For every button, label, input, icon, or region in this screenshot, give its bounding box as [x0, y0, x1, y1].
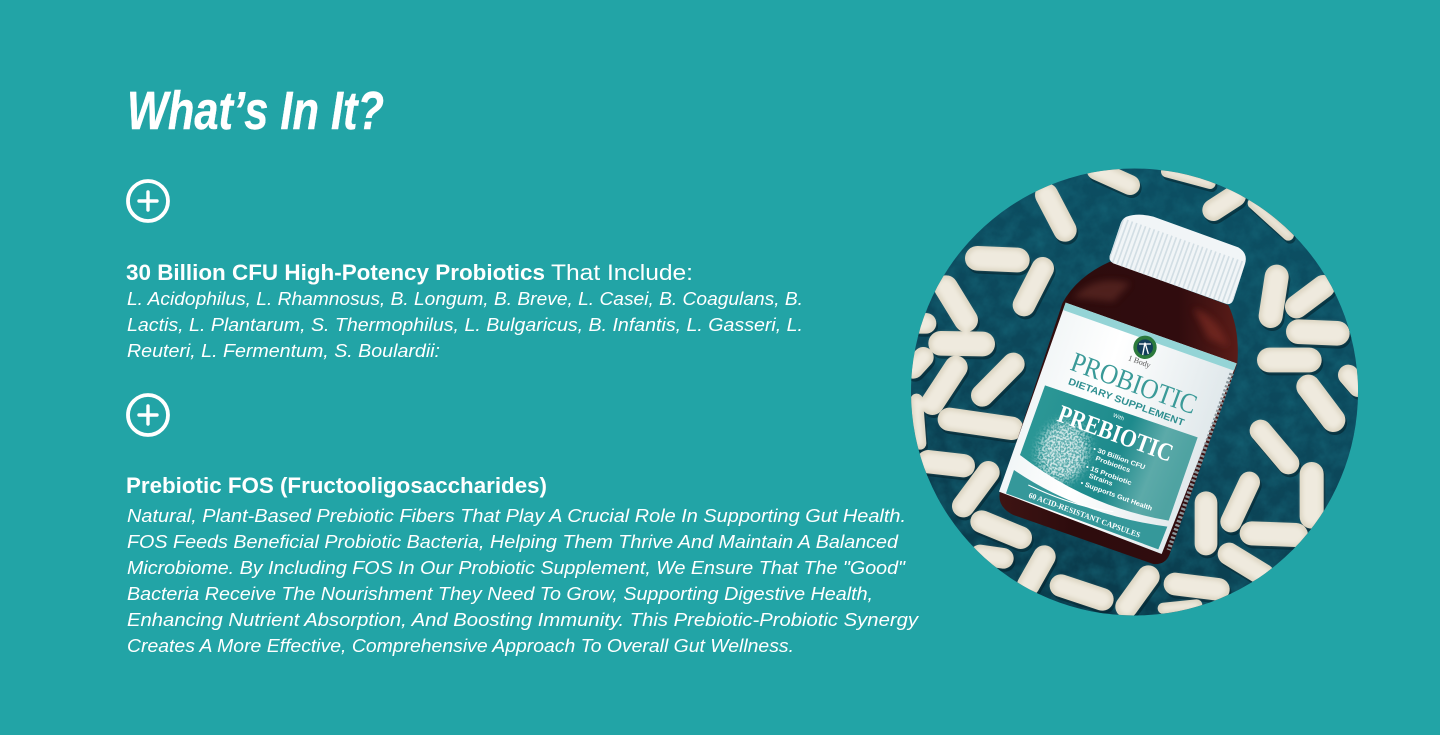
label text [1027, 347, 1201, 540]
label text: • Supports Gut Health [1079, 480, 1153, 513]
text block: prebiotic [126, 473, 919, 656]
lower teal band [1006, 470, 1167, 549]
circular product photo [905, 160, 1365, 625]
prebiotic description: Microbiome. By Including FOS In Our Probiotic Supplement, We Ensure That The "Good" [127, 558, 907, 578]
capsules [913, 170, 1360, 611]
heading: probiotics: That Include: [551, 260, 693, 285]
bottle glass [999, 262, 1238, 564]
heading: probiotics: 30 Billion CFU High-Potency Probiotics [126, 260, 545, 285]
bottle cap [1109, 215, 1246, 304]
icon: plus circle 2 [128, 395, 168, 435]
label text: 60 ACID-RESISTANT CAPSULES [1027, 491, 1142, 540]
heading: prebiotic: Prebiotic FOS (Fructooligosaccharides) [126, 473, 547, 498]
label text: DIETARY SUPPLEMENT [1067, 376, 1186, 429]
glass highlights [1073, 281, 1130, 302]
bottle [999, 215, 1246, 564]
text block: probiotics [126, 260, 803, 361]
label text: PREBIOTIC [1054, 400, 1177, 468]
white swoosh [1028, 485, 1113, 512]
label text: PROBIOTIC [1067, 347, 1201, 421]
strain list: L. Acidophilus, L. Rhamnosus, B. Longum, B. Breve, L. Casei, B. Coagulans, B. [127, 289, 803, 309]
strain list: Lactis, L. Plantarum, S. Thermophilus, L. Bulgaricus, B. Infantis, L. Gasseri, L. [127, 315, 803, 335]
prebiotic description [127, 506, 919, 656]
teal panel [1020, 385, 1198, 521]
title: What’s In It? [127, 81, 384, 141]
label text: With [1112, 413, 1125, 422]
strain list [127, 289, 803, 361]
plant illustration [1029, 413, 1098, 490]
strain list: Reuteri, L. Fermentum, S. Boulardii: [127, 341, 440, 361]
prebiotic description: Enhancing Nutrient Absorption, And Boosting Immunity. This Prebiotic-Probiotic Synergy [127, 610, 919, 630]
label text: • 30 Billion CFU [1092, 446, 1146, 471]
label text: 1 Body [1127, 353, 1152, 370]
icon: plus circle 1 [128, 181, 168, 221]
label text: Probiotics [1094, 455, 1131, 475]
label text: Strains [1088, 473, 1114, 488]
barcode strip [1169, 373, 1232, 550]
logo [1133, 336, 1157, 359]
label text: • 15 Probiotic [1085, 464, 1133, 487]
prebiotic description: Bacteria Receive The Nourishment They Need To Grow, Supporting Digestive Health, [127, 584, 873, 604]
prebiotic description: Creates A More Effective, Comprehensive Approach To Overall Gut Wellness. [127, 636, 794, 656]
bottle label [999, 303, 1237, 554]
prebiotic description: FOS Feeds Beneficial Probiotic Bacteria, Helping Them Thrive And Maintain A Balanced [127, 532, 899, 552]
prebiotic description: Natural, Plant-Based Prebiotic Fibers That Play A Crucial Role In Supporting Gut Health. [127, 506, 906, 526]
